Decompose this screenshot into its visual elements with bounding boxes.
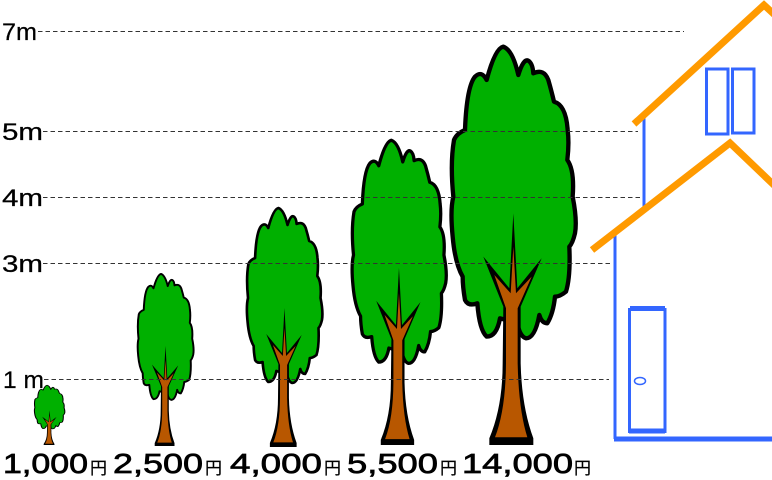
price: 1,000 yen [3, 448, 107, 479]
left window [706, 69, 728, 134]
tree: 1,000 yen [34, 385, 65, 445]
upper roof [634, 5, 772, 124]
price: 14,000 yen: 円 [574, 459, 591, 478]
tree: 5,500 yen [352, 140, 446, 445]
price: 1,000 yen: 1,000 [3, 448, 88, 479]
label: 7m: 7m [2, 19, 37, 46]
house [592, 5, 772, 439]
door knob [634, 378, 646, 384]
price: 2,500 yen [113, 448, 222, 479]
price: 5,500 yen: 円 [440, 459, 457, 478]
door [629, 308, 665, 432]
price: 14,000 yen: 14,000 [462, 448, 573, 479]
price labels [3, 448, 591, 479]
label: 3m: 3m [2, 251, 43, 278]
lower wall [614, 235, 616, 439]
price: 4,000 yen: 円 [324, 459, 341, 478]
price: 2,500 yen: 円 [205, 459, 222, 478]
tree: 4,000 yen [247, 208, 322, 447]
tree: 14,000 yen [451, 47, 576, 445]
upper wall [642, 117, 646, 207]
tree: 2,500 yen [138, 274, 194, 446]
price: 5,500 yen [347, 448, 457, 479]
price: 1,000 yen: 円 [90, 459, 107, 478]
price: 5,500 yen: 5,500 [347, 448, 438, 479]
label: 4m: 4m [2, 185, 43, 212]
right window [732, 69, 754, 133]
height axis labels [2, 19, 44, 394]
price: 4,000 yen [230, 448, 341, 479]
price: 4,000 yen: 4,000 [230, 448, 322, 479]
price: 2,500 yen: 2,500 [113, 448, 203, 479]
foundation line [614, 436, 772, 442]
label: 5m: 5m [2, 119, 43, 146]
price: 14,000 yen [462, 448, 591, 479]
label: 1m: 1 m [3, 367, 44, 394]
lower roof [592, 143, 772, 250]
